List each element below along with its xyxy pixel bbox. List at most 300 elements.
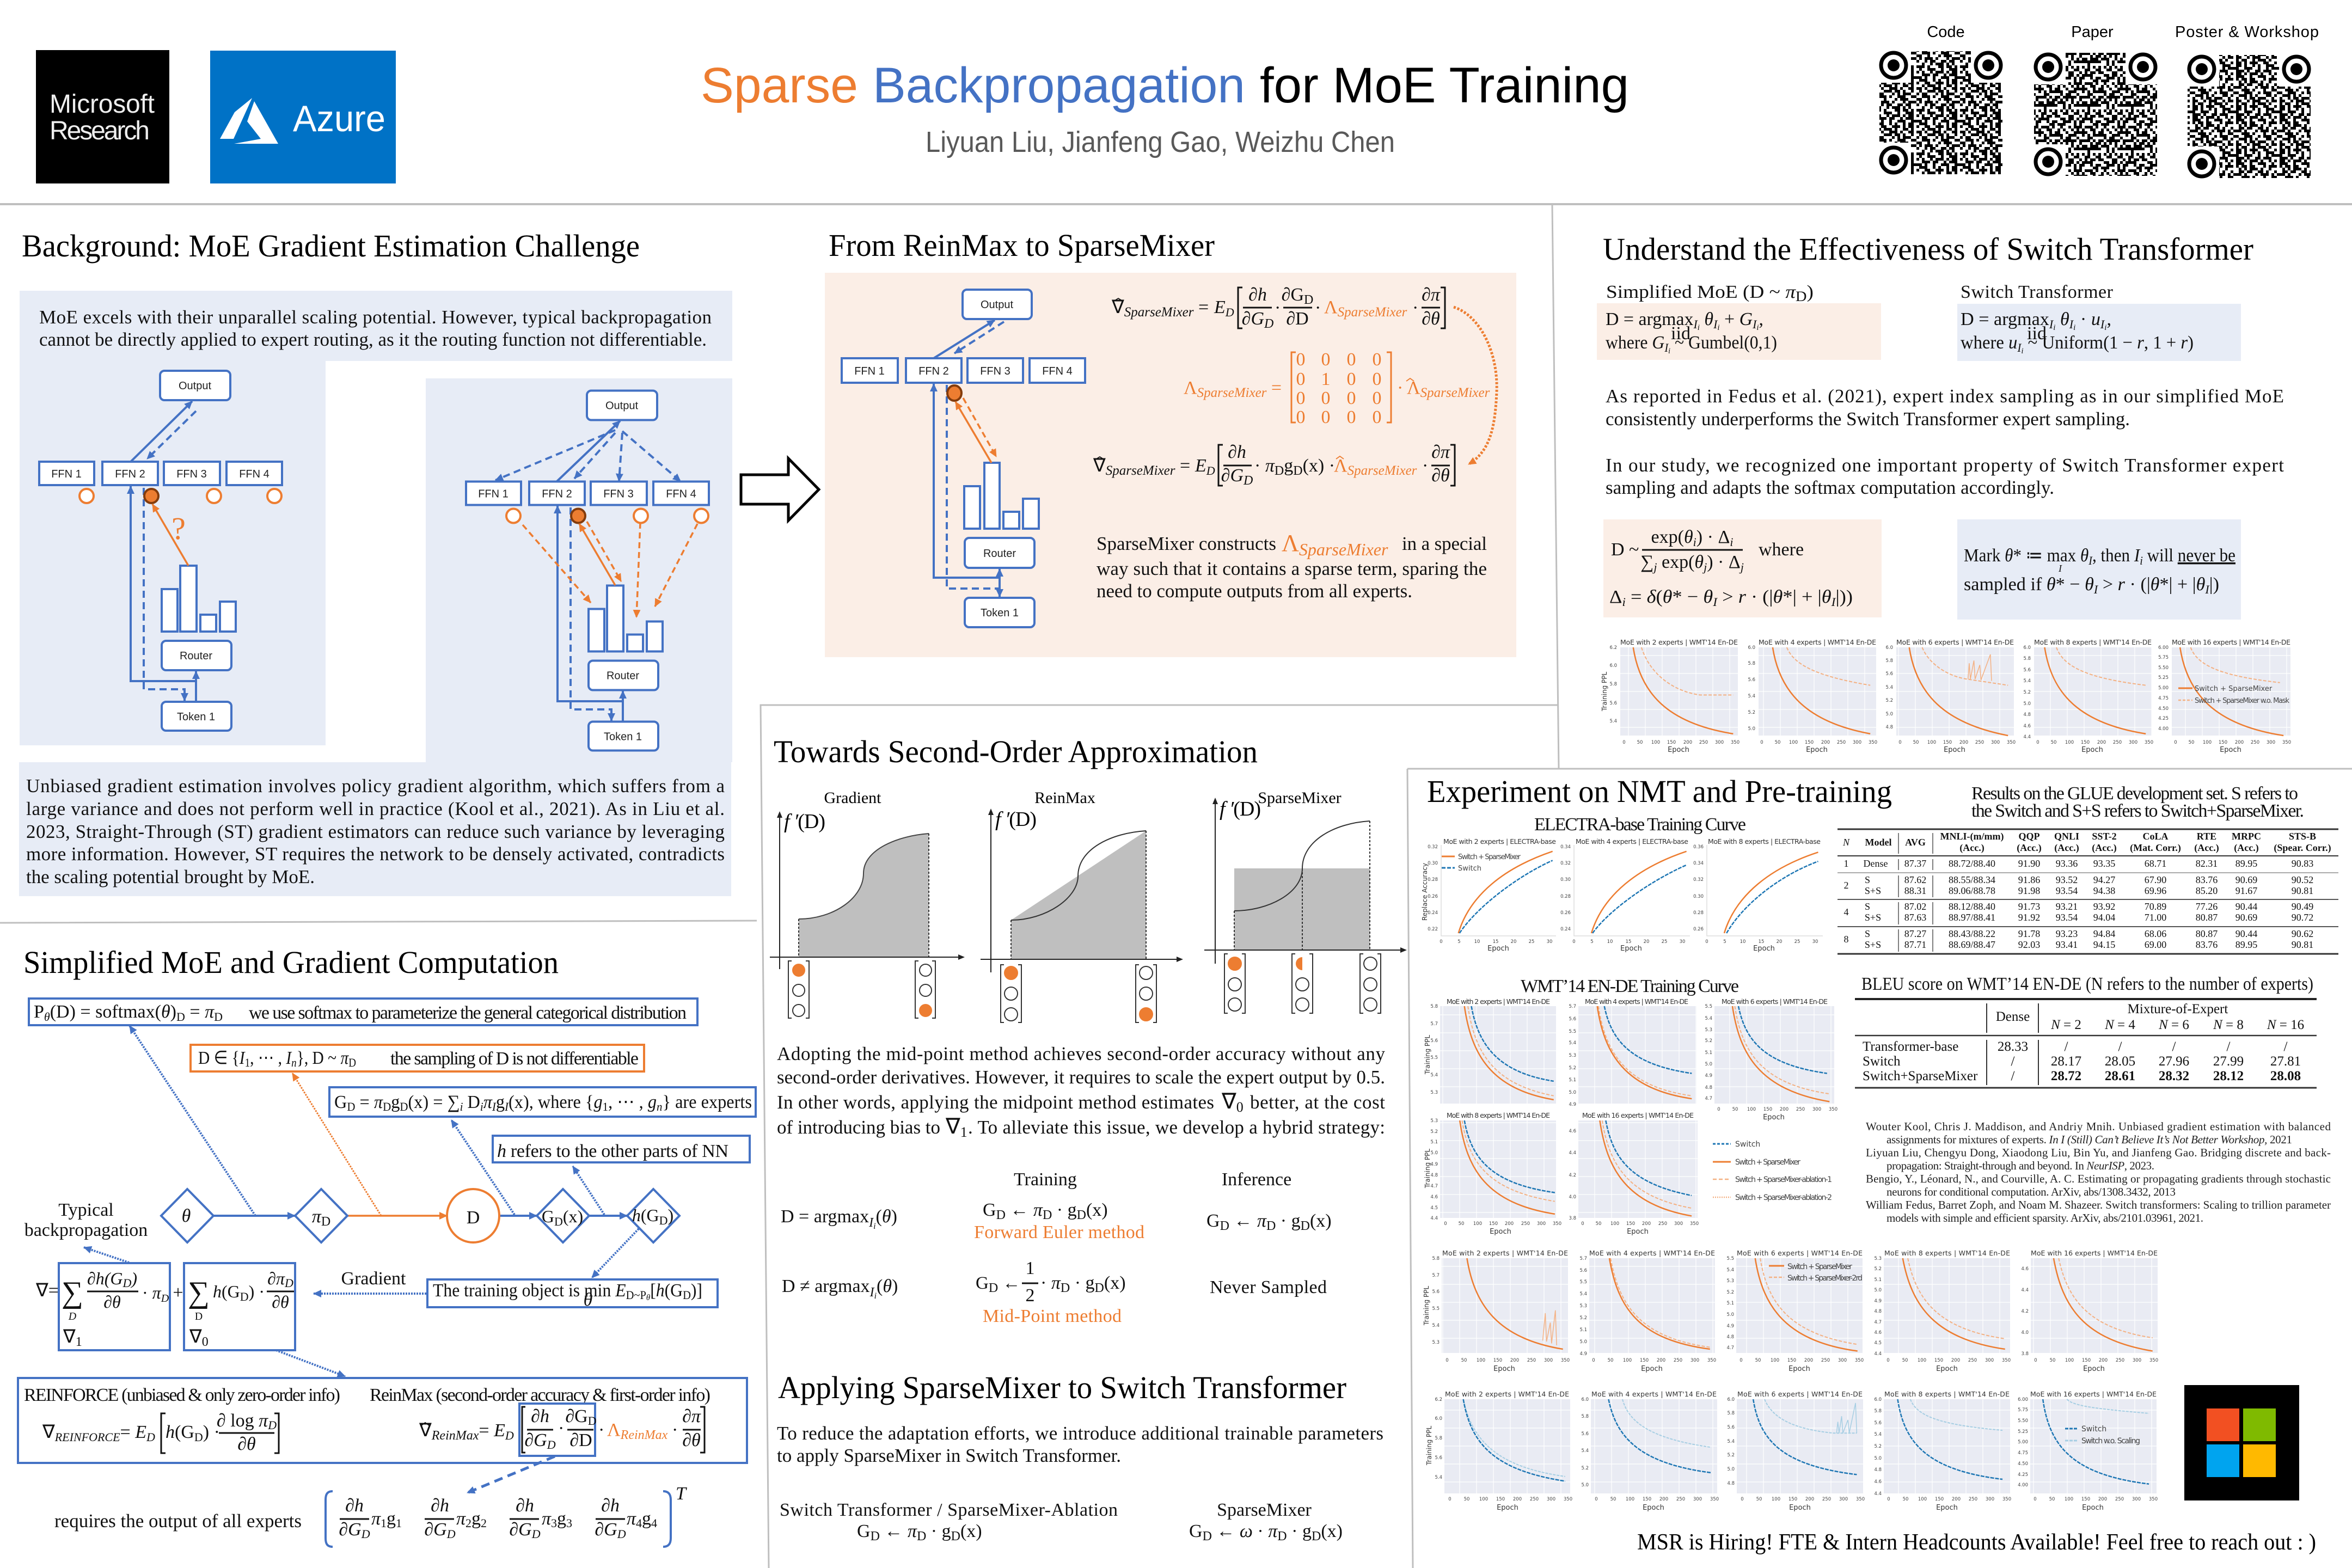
chart: ablation, 8 experts: 100 [1473,1221,1482,1227]
chart: scaling, 16 experts with legend: Switch [2081,1425,2106,1434]
chart: ReinMax integration: f ′(D) [995,808,1037,831]
table: GLUE results: 77.26 [2196,901,2218,912]
callout: expert gating definition: I [492,1100,497,1113]
table: GLUE results: 90.49 [2292,901,2313,912]
chart: ablation, 6 experts: 200 [1780,1107,1788,1112]
chart: scaling, 16 experts with legend: 4.00 [2018,1483,2028,1488]
table: GLUE results: 88.69/88.47 [1949,939,1995,950]
text: important property: In our study, we recognized one important property of Switch Transformer expert [1606,455,2284,476]
table: GLUE results: 91.90 [2018,858,2040,869]
formula: expert outputs vector: ∂G [424,1520,447,1540]
chart: mask, 4 experts: 50 [1775,740,1780,745]
chart: mask, 4 experts: 250 [1837,740,1846,745]
callout: expert gating definition: g [496,1092,505,1112]
chart: second-order, 8 experts: 350 [2002,1358,2011,1363]
chart: ELECTRA 8 experts: 20 [1777,939,1782,945]
formula: sparse matrix: 0 [1347,407,1356,427]
chart: ELECTRA 2 experts: 0.26 [1428,894,1438,899]
logo: Microsoft Research [36,50,169,183]
formula box: Gumbel sampling: θ [1704,309,1713,329]
table: BLEU scores: 28.05 [2105,1054,2135,1069]
formula: SparseMixer update: ω · π [1240,1521,1277,1541]
formula: expert outputs vector: ∂G [339,1520,362,1540]
table: GLUE results: 71.00 [2145,912,2166,923]
chart: mask, 8 experts: 250 [2113,740,2122,745]
chart: ELECTRA 8 experts: 30 [1812,939,1818,945]
chart: mask, 6 experts: 50 [1913,740,1919,745]
table: hybrid strategy: 1 [1026,1258,1034,1278]
flow: computation graph: π [312,1206,322,1227]
chart: ablation, 6 experts [1705,997,1837,1122]
formula: sparse matrix: 0 [1372,388,1382,408]
heading: From ReinMax to SparseMixer: From ReinMax to SparseMixer [829,228,1215,263]
table: GLUE results: S [1865,874,1870,885]
chart: ablation, 6 experts: 5.2 [1705,1038,1712,1044]
formula: REINFORCE: h(G [166,1422,194,1442]
callout: expert gating definition: g [593,1092,603,1112]
text: SparseMixer explanation: SparseMixer constructs [1097,533,1276,554]
chart: second-order, 8 experts: 4.8 [1874,1309,1882,1314]
chart: ablation, 4 experts: 5.1 [1569,1077,1576,1083]
formula box: adapted softmax: I [1712,595,1718,609]
callout: expert gating definition: D [347,1100,355,1113]
table: hybrid strategy: θ) [883,1276,898,1296]
chart: second-order, 2 experts: 5.7 [1432,1273,1440,1278]
chart: second-order, 6 experts with legend: 300 [1838,1358,1847,1363]
callout: softmax parameterization: we use softmax to parameterize the general categorical distribution [249,1003,687,1023]
table: BLEU scores: 28.72 [2051,1069,2081,1083]
table: hybrid strategy: D [1077,1208,1086,1222]
panel: unbiased gradient estimation text: Unbiased gradient estimation involves policy gradient algorithm, which suffers from a [26,775,725,797]
formula box: Uniform sampling: I [2017,341,2022,354]
chart: Gradient integration: f ′(D) [784,810,825,833]
formula box: adapted softmax: i [1693,535,1696,549]
table: GLUE results: SST-2 [2092,831,2117,842]
chart: second-order, 16 experts [2021,1249,2158,1373]
chart: mask, 8 experts: 50 [2051,740,2056,745]
chart: ablation, 6 experts: 5.5 [1705,1004,1712,1009]
formula box: adapted softmax: exp( [1657,552,1694,572]
table: BLEU scores [1855,999,2317,1088]
formula: SparseMixer gradient [1111,285,1445,331]
text: GLUE caption: the Switch and S+S refers to Switch+SparseMixer. [1971,801,2304,821]
formula box: adapted softmax: D ~ [1611,540,1639,560]
chart: mask, 2 experts: 250 [1699,740,1708,745]
callout: softmax parameterization: D [176,1010,185,1024]
chart: ablation, 16 experts: 0 [1581,1221,1584,1227]
chart: scaling, 8 experts: 4.4 [1874,1491,1882,1497]
table: GLUE results: 93.92 [2093,901,2115,912]
callout: expert gating definition: } are experts [662,1092,752,1112]
chart: second-order, 2 experts: 250 [1527,1358,1536,1363]
table: GLUE results: 94.84 [2093,928,2115,939]
chart: second-order, 6 experts with legend: 4.8 [1726,1334,1734,1340]
formula: gradient decomposition: ∂θ [103,1292,121,1312]
chart: ablation, 4 experts: MoE with 4 experts | WMT'14 En-DE [1585,997,1688,1006]
chart: mask, 2 experts: 200 [1683,740,1692,745]
table: BLEU scores: / [2065,1039,2068,1054]
chart: second-order, 8 experts: 0 [1886,1358,1890,1363]
chart: ablation, 4 experts [1569,997,1696,1107]
table: GLUE results: 83.76 [2196,939,2218,950]
chart: scaling, 4 experts: 5.2 [1581,1466,1589,1471]
heading: Applying SparseMixer to Switch Transformer: Applying SparseMixer to Switch Transformer [778,1370,1346,1405]
panel: background intro text [20,291,732,361]
chart: second-order, 8 experts: 300 [1985,1358,1994,1363]
chart: mask, 4 experts [1748,638,1877,754]
formula: SparseMixer rewritten gradient: E [1195,456,1206,476]
text: references [1866,1120,2331,1224]
chart: ablation, 6 experts: 50 [1732,1107,1738,1112]
table: GLUE results: 90.83 [2292,858,2313,869]
chart: scaling, 16 experts with legend: 100 [2065,1497,2073,1502]
title: Backpropagation [873,58,1245,113]
formula box: Uniform sampling: θ [2060,309,2069,329]
chart: ablation, 2 experts: 5.5 [1430,1055,1438,1061]
panel: unbiased gradient estimation text: large variance and does not perform well in practice (Kool et al., 2021). As in Liu et al. [26,798,725,819]
chart: scaling, 2 experts: 0 [1448,1497,1451,1502]
chart: scaling, 4 experts: 5.4 [1581,1448,1589,1454]
formula box: adapted softmax: where [1759,540,1804,560]
formula: expert outputs vector: 3 [566,1516,572,1530]
callout: training objective: )] [691,1281,702,1301]
chart: ELECTRA 8 experts: 25 [1794,939,1800,945]
chart: scaling, 8 experts [1874,1390,2011,1512]
chart: scaling, 2 experts: MoE with 2 experts | WMT'14 En-DE [1445,1390,1569,1398]
table: hybrid strategy: ( [877,1276,883,1296]
chart: ELECTRA 2 experts [1421,837,1556,953]
formula: expert outputs vector: ∂h [516,1496,534,1516]
table: GLUE results: (Acc.) [1959,842,1984,854]
chart: ablation, 8 experts: 5.1 [1430,1140,1438,1145]
callout: expert gating definition: i [480,1100,483,1113]
callout: sampling not differentiable: π [340,1048,349,1068]
chart: ablation, 2 experts: 5.8 [1430,1004,1438,1009]
chart: second-order, 4 experts: 5.4 [1579,1291,1587,1297]
table: GLUE results: MNLI-(m/mm) [1940,831,2004,842]
flow: computation graph: (x) [563,1206,583,1226]
callout: softmax parameterization: θ) [161,1002,176,1022]
chart: scaling, 2 experts: 6.0 [1435,1416,1442,1422]
text: references: Wouter Kool, Chris J. Maddison, and Andriy Mnih. Unbiased gradient estimation with balanced [1866,1120,2331,1133]
chart: scaling, 16 experts with legend: Switch w.o. Scaling [2081,1437,2140,1445]
formula: SparseMixer rewritten gradient: · π [1254,456,1275,476]
callout: training objective: [ [650,1281,656,1301]
chart: ablation, 6 experts: 5.0 [1705,1062,1712,1067]
chart: scaling, 2 experts: 5.6 [1435,1455,1442,1461]
formula: expert outputs vector: ∂G [595,1520,617,1540]
table: hybrid strategy: (x) [1086,1200,1108,1220]
chart: ablation, 16 experts: 250 [1658,1221,1667,1227]
sparse routing diagram: Router [983,548,1016,560]
formula: sparse matrix: SparseMixer [1420,385,1490,400]
logo: Microsoft Research: Research [50,117,150,145]
callout: sampling not differentiable: the sampling of D is not differentiable [390,1049,639,1069]
chart: second-order, 4 experts: 4.9 [1579,1351,1587,1357]
formula box: Uniform sampling: u [2091,309,2100,329]
table: GLUE results: (Acc.) [2017,842,2042,854]
text: references: William Fedus, Barret Zoph, and Noam M. Shazeer. Switch transformers: Scaling to trillion parameter [1866,1198,2331,1211]
chart: scaling, 4 experts: 300 [1693,1497,1702,1502]
formula: SparseMixer gradient: · [1412,298,1418,318]
chart: mask, 16 experts with legend: 0 [2174,740,2177,745]
chart: mask, 6 experts: 200 [1959,740,1968,745]
formula: SparseMixer update: ← [1212,1521,1240,1541]
table: GLUE results [1837,829,2338,954]
arrow: dotted substitution curve [1454,307,1497,464]
panel: routing diagram with non-differentiable sampling: Output [179,380,211,392]
label: Simplified MoE: ) [1807,282,1814,302]
chart: mask, 6 experts: 350 [2007,740,2016,745]
chart: ELECTRA 4 experts: 30 [1680,939,1685,945]
heading: Simplified MoE and Gradient Computation: Simplified MoE and Gradient Computation [23,945,559,980]
flow: computation graph: h(G [632,1205,659,1225]
chart: ablation, 8 experts: 4.4 [1430,1216,1438,1221]
chart: scaling, 8 experts: 6.0 [1874,1397,1882,1402]
chart: mask, 4 experts: 5.6 [1748,677,1755,683]
chart: second-order, 16 experts: 100 [2065,1358,2074,1363]
chart: scaling, 6 experts: 5.4 [1727,1439,1735,1444]
formula: ReinMax: D [505,1429,514,1442]
callout: expert gating definition: D [400,1100,408,1113]
authors: Liyuan Liu, Jianfeng Gao, Weizhu Chen [926,126,1395,158]
callout: training objective: θ [584,1290,592,1310]
formula box: adapted softmax: ∑ [1640,552,1653,572]
formula box: Gumbel sampling: where G [1606,333,1665,353]
table: GLUE results: 69.96 [2145,885,2166,896]
text: mid-point method paragraph: 1 [960,1124,967,1140]
chart: mask, 6 experts: 250 [1975,740,1984,745]
chart: mask, 16 experts with legend: Epoch [2220,746,2241,754]
table: GLUE results: Dense [1864,858,1888,869]
chart: ablation, 16 experts: 300 [1674,1221,1683,1227]
chart: mask, 8 experts: MoE with 8 experts | WMT'14 En-DE [2034,638,2152,646]
sparse routing diagram: FFN 3 [980,365,1010,377]
chart: second-order, 4 experts [1579,1249,1716,1373]
text: Fedus comparison: As reported in Fedus et al. (2021), expert index sampling as in our simplified MoE [1606,385,2284,407]
chart: ablation, 2 experts [1424,997,1556,1104]
chart: scaling, 4 experts: 6.0 [1581,1397,1589,1402]
chart: second-order, 6 experts with legend: 0 [1739,1358,1743,1363]
legend: ablation curves: Switch + SparseMixer-ablation-1 [1735,1175,1832,1184]
formula: SparseMixer rewritten gradient: SparseMixer [1106,463,1175,478]
table: GLUE results: 82.31 [2196,858,2218,869]
flow: computation graph: θ [182,1206,191,1226]
chart: scaling, 4 experts: 50 [1610,1497,1616,1502]
chart: second-order, 6 experts with legend: 4.7 [1726,1345,1734,1351]
formula: SparseMixer update [1189,1500,1343,1543]
callout: training objective: θ [646,1293,650,1302]
table: hybrid strategy: ( [876,1206,882,1227]
table: GLUE results: S+S [1865,912,1881,923]
chart: ELECTRA 4 experts: Epoch [1620,945,1642,953]
table: BLEU scores: 28.17 [2051,1054,2081,1069]
formula box: never sampled condition [1957,519,2241,620]
formula: sparse matrix: 0 [1296,350,1306,370]
chart: ablation, 6 experts: MoE with 6 experts | WMT'14 En-DE [1722,997,1828,1006]
panel: routing diagram with straight-through estimator [426,378,732,762]
callout: sampling not differentiable: }, D ~ [297,1048,340,1068]
chart: second-order, 6 experts with legend: 350 [1855,1358,1864,1363]
chart: ablation, 8 experts: Training PPL [1424,1149,1431,1189]
chart: scaling, 8 experts: 4.6 [1874,1479,1882,1485]
chart: second-order, 4 experts: 300 [1690,1358,1699,1363]
chart: scaling, 2 experts: 350 [1564,1497,1572,1502]
chart: ablation, 6 experts: 100 [1747,1107,1756,1112]
formula box: never sampled condition: I [2088,554,2093,567]
formula box: adapted softmax [1603,519,1882,617]
table: hybrid strategy: D [1061,1281,1070,1295]
chart: ablation, 2 experts: Training PPL [1424,1035,1431,1075]
table: GLUE results: MRPC [2232,831,2261,842]
text: references: Bengio, Y., Léonard, N., and Courville, A. C. Estimating or propagating gradients through stochastic [1866,1172,2331,1185]
formula box: Uniform sampling: i [2053,323,2055,332]
callout: expert gating definition: (x) = ∑ [408,1092,460,1112]
table: GLUE results: (Acc.) [2194,842,2219,854]
chart: second-order, 8 experts: 5.1 [1874,1277,1882,1283]
chart: second-order, 2 experts: 5.4 [1432,1323,1440,1328]
chart: mask, 2 experts: 6.2 [1609,645,1617,651]
chart: scaling, 4 experts: 5.6 [1581,1431,1589,1437]
callout: softmax parameterization: P [34,1002,44,1022]
table: hybrid strategy: 2 [1026,1285,1034,1306]
formula: ReinMax: = [479,1420,494,1441]
formula box: adapted softmax: j [1739,560,1744,574]
panel: REINFORCE and ReinMax estimators: REINFORCE (unbiased & only zero-order info) [24,1385,340,1405]
table: GLUE results: STS-B [2289,831,2316,842]
chart: second-order, 6 experts with legend: 200 [1804,1358,1813,1363]
panel: background intro text: cannot be directly applied to expert routing, as it the routing function not differentiable. [39,329,707,350]
chart: scaling, 4 experts: 150 [1643,1497,1651,1502]
chart: second-order, 6 experts with legend: 5.5 [1726,1256,1734,1261]
chart: mask, 2 experts: 0 [1622,740,1626,745]
formula: SparseMixer gradient: E [1214,297,1226,317]
chart: scaling, 8 experts: 5.8 [1874,1408,1882,1414]
chart: mask, 2 experts: Epoch [1668,746,1689,754]
panel: REINFORCE and ReinMax estimators [18,1378,747,1463]
callout: sampling not differentiable [191,1045,644,1071]
table: BLEU scores: Switch+SparseMixer [1863,1069,1978,1083]
callout: expert gating definition: π [374,1092,383,1112]
formula box: adapted softmax: δ(θ* − θ [1647,587,1712,607]
chart: mask, 8 experts: 5.6 [2023,667,2031,673]
text: references: neurons for conditional computation. ArXiv, abs/1308.3432, 2013 [1886,1185,2176,1198]
table: GLUE results: 89.06/88.78 [1949,885,1995,896]
table: GLUE results: (Spear. Corr.) [2274,842,2331,854]
chart: scaling, 16 experts with legend: 4.75 [2018,1450,2028,1456]
table: BLEU scores: N = 6 [2158,1018,2189,1032]
table: GLUE results: 87.02 [1904,901,1926,912]
table: GLUE results: 88.43/88.22 [1949,928,1995,939]
chart: second-order, 4 experts: 5.0 [1579,1339,1587,1345]
formula box: Gumbel sampling: iid [1671,323,1690,344]
formula: SparseMixer rewritten gradient: ∂h [1228,442,1246,462]
chart: scaling, 4 experts: 5.8 [1581,1414,1589,1419]
formula: expert outputs vector: T [676,1484,687,1504]
formula box: Uniform sampling: r, 1 + r) [2137,333,2194,353]
table: hybrid strategy [781,1169,1332,1326]
table: BLEU scores: 28.12 [2213,1069,2244,1083]
table: GLUE results: 68.06 [2145,928,2166,939]
chart: ablation, 8 experts: 4.5 [1430,1205,1438,1211]
chart: ablation, 4 experts: 5.7 [1569,1004,1576,1009]
table: GLUE results: 87.27 [1904,928,1926,939]
QR code: Paper: Paper [2071,23,2114,41]
table: GLUE results: RTE [2197,831,2216,842]
chart: ReinMax integration [981,789,1183,1022]
chart: ablation, 8 experts: 4.7 [1430,1184,1438,1189]
chart: mask, 6 experts: 5.4 [1885,685,1893,690]
chart: ablation, 6 experts: 0 [1717,1107,1720,1112]
formula box: Uniform sampling: I [2049,317,2054,331]
chart: ELECTRA 2 experts: Epoch [1487,945,1509,953]
table: GLUE results: 91.78 [2018,928,2040,939]
text: mid-point method paragraph: second-order derivatives. However, it requires to scale the expert output by 0.5. [777,1067,1385,1088]
chart: ablation, 6 experts: 350 [1829,1107,1837,1112]
table: hybrid strategy: · g [1070,1273,1095,1293]
formula: SparseMixer rewritten gradient: (x) · [1303,456,1335,476]
panel: routing diagram with non-differentiable sampling [20,361,326,745]
table: GLUE results: 1 [1843,858,1849,869]
formula box: Gumbel sampling: D = argmax [1606,309,1694,329]
formula: expert outputs vector: ∂h [601,1496,620,1516]
callout: expert gating definition: n [657,1100,662,1113]
chart: mask, 16 experts with legend: 300 [2267,740,2275,745]
formula box: adapted softmax: Δ [1609,587,1621,607]
chart: mask, 8 experts: 100 [2065,740,2074,745]
chart: ablation, 6 experts: 250 [1796,1107,1805,1112]
chart: second-order, 8 experts: 50 [1902,1358,1908,1363]
formula: REINFORCE: ∇ [42,1422,55,1442]
formula: sparse matrix: SparseMixer [1197,385,1267,400]
chart: mask, 16 experts with legend: 4.50 [2158,706,2169,712]
formula box: Uniform sampling: · [2075,309,2091,329]
chart: second-order, 2 experts: Epoch [1493,1365,1515,1373]
callout: softmax parameterization: D [214,1010,223,1024]
formula: SparseMixer rewritten gradient: ∇ [1093,456,1106,476]
chart: ELECTRA 8 experts: Epoch [1753,945,1775,953]
callout: softmax parameterization: π [205,1002,215,1022]
formula box: adapted softmax: ) · Δ [1696,527,1730,547]
chart: mask, 6 experts: 300 [1991,740,2000,745]
chart: mask, 4 experts: MoE with 4 experts | WMT'14 En-DE [1759,638,1876,646]
chart: scaling, 6 experts: Epoch [1789,1504,1811,1512]
panel: routing diagram with straight-through estimator: Router [607,670,639,682]
table: GLUE results: 90.72 [2292,912,2313,923]
table: GLUE results: (Acc.) [2234,842,2259,854]
callout: training objective: D [683,1288,691,1302]
formula box: adapted softmax: j [1652,560,1657,574]
chart: second-order, 6 experts with legend: Epoch [1788,1365,1810,1373]
table: hybrid strategy: ← [1229,1211,1257,1231]
table: GLUE results: 87.63 [1904,912,1926,923]
chart: ELECTRA 2 experts: 20 [1511,939,1516,945]
chart: ablation, 16 experts: 100 [1610,1221,1619,1227]
sparse routing diagram: FFN 4 [1042,365,1073,377]
formula box: Uniform sampling: i [2104,323,2106,332]
table: GLUE results: S [1865,901,1870,912]
panel: unbiased gradient estimation text [19,762,731,896]
chart: ELECTRA 2 experts: Switch [1458,865,1481,873]
chart: ELECTRA 2 experts: MoE with 2 experts | ELECTRA-base [1443,837,1556,846]
chart: scaling, 4 experts: 0 [1595,1497,1598,1502]
text: important property [1606,455,2284,498]
text: references: propagation: Straight-through and beyond. In NeurISP, 2023. [1886,1159,2154,1172]
chart: second-order, 16 experts: 4.6 [2021,1266,2029,1272]
formula: SparseMixer rewritten gradient: D [1293,464,1303,478]
chart: mask, 4 experts: Epoch [1806,746,1828,754]
table: hybrid strategy: i [873,1222,876,1231]
